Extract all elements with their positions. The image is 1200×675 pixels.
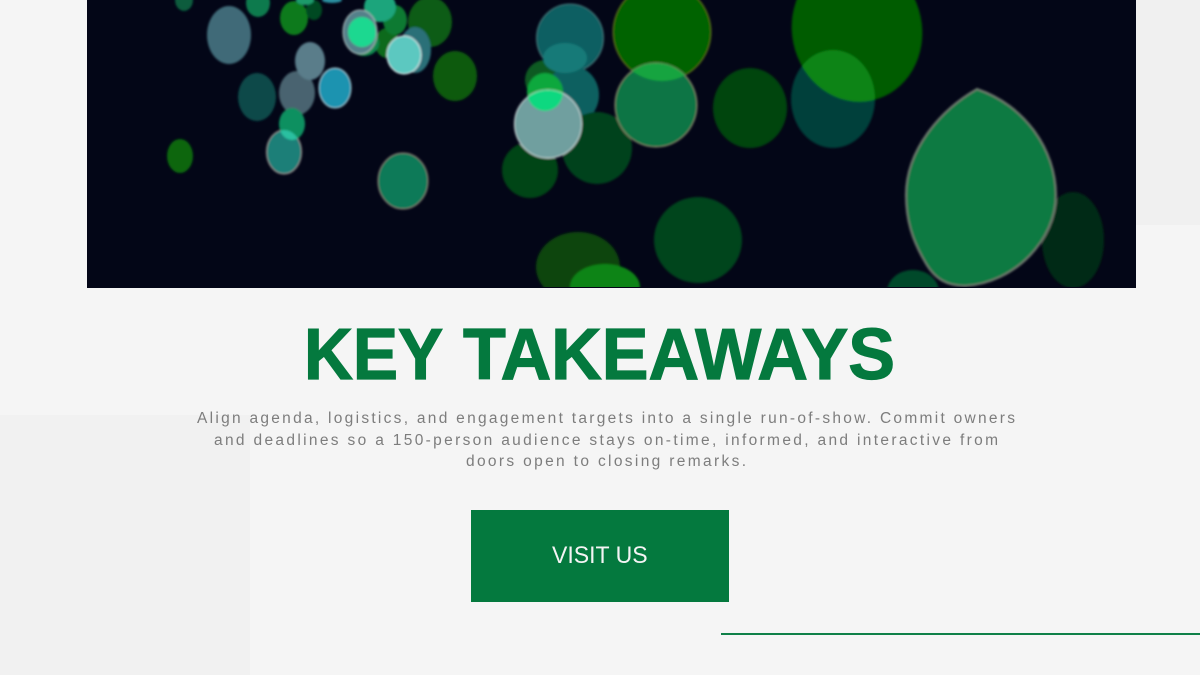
photo: green bokeh lights <box>87 0 1136 288</box>
description text: Align agenda, logistics, and engagement targets into a single run-of-show. Commit owners <box>197 410 1015 427</box>
accent line <box>721 633 1200 635</box>
description text <box>197 410 1015 470</box>
button: visit us: VISIT US <box>552 542 648 569</box>
button: visit us <box>471 510 729 602</box>
title: TAKEAWAYS <box>463 315 895 395</box>
description text: and deadlines so a 150-person audience stays on-time, informed, and interactive from <box>214 432 998 449</box>
title: KEY <box>304 314 443 394</box>
description text: doors open to closing remarks. <box>466 453 746 470</box>
